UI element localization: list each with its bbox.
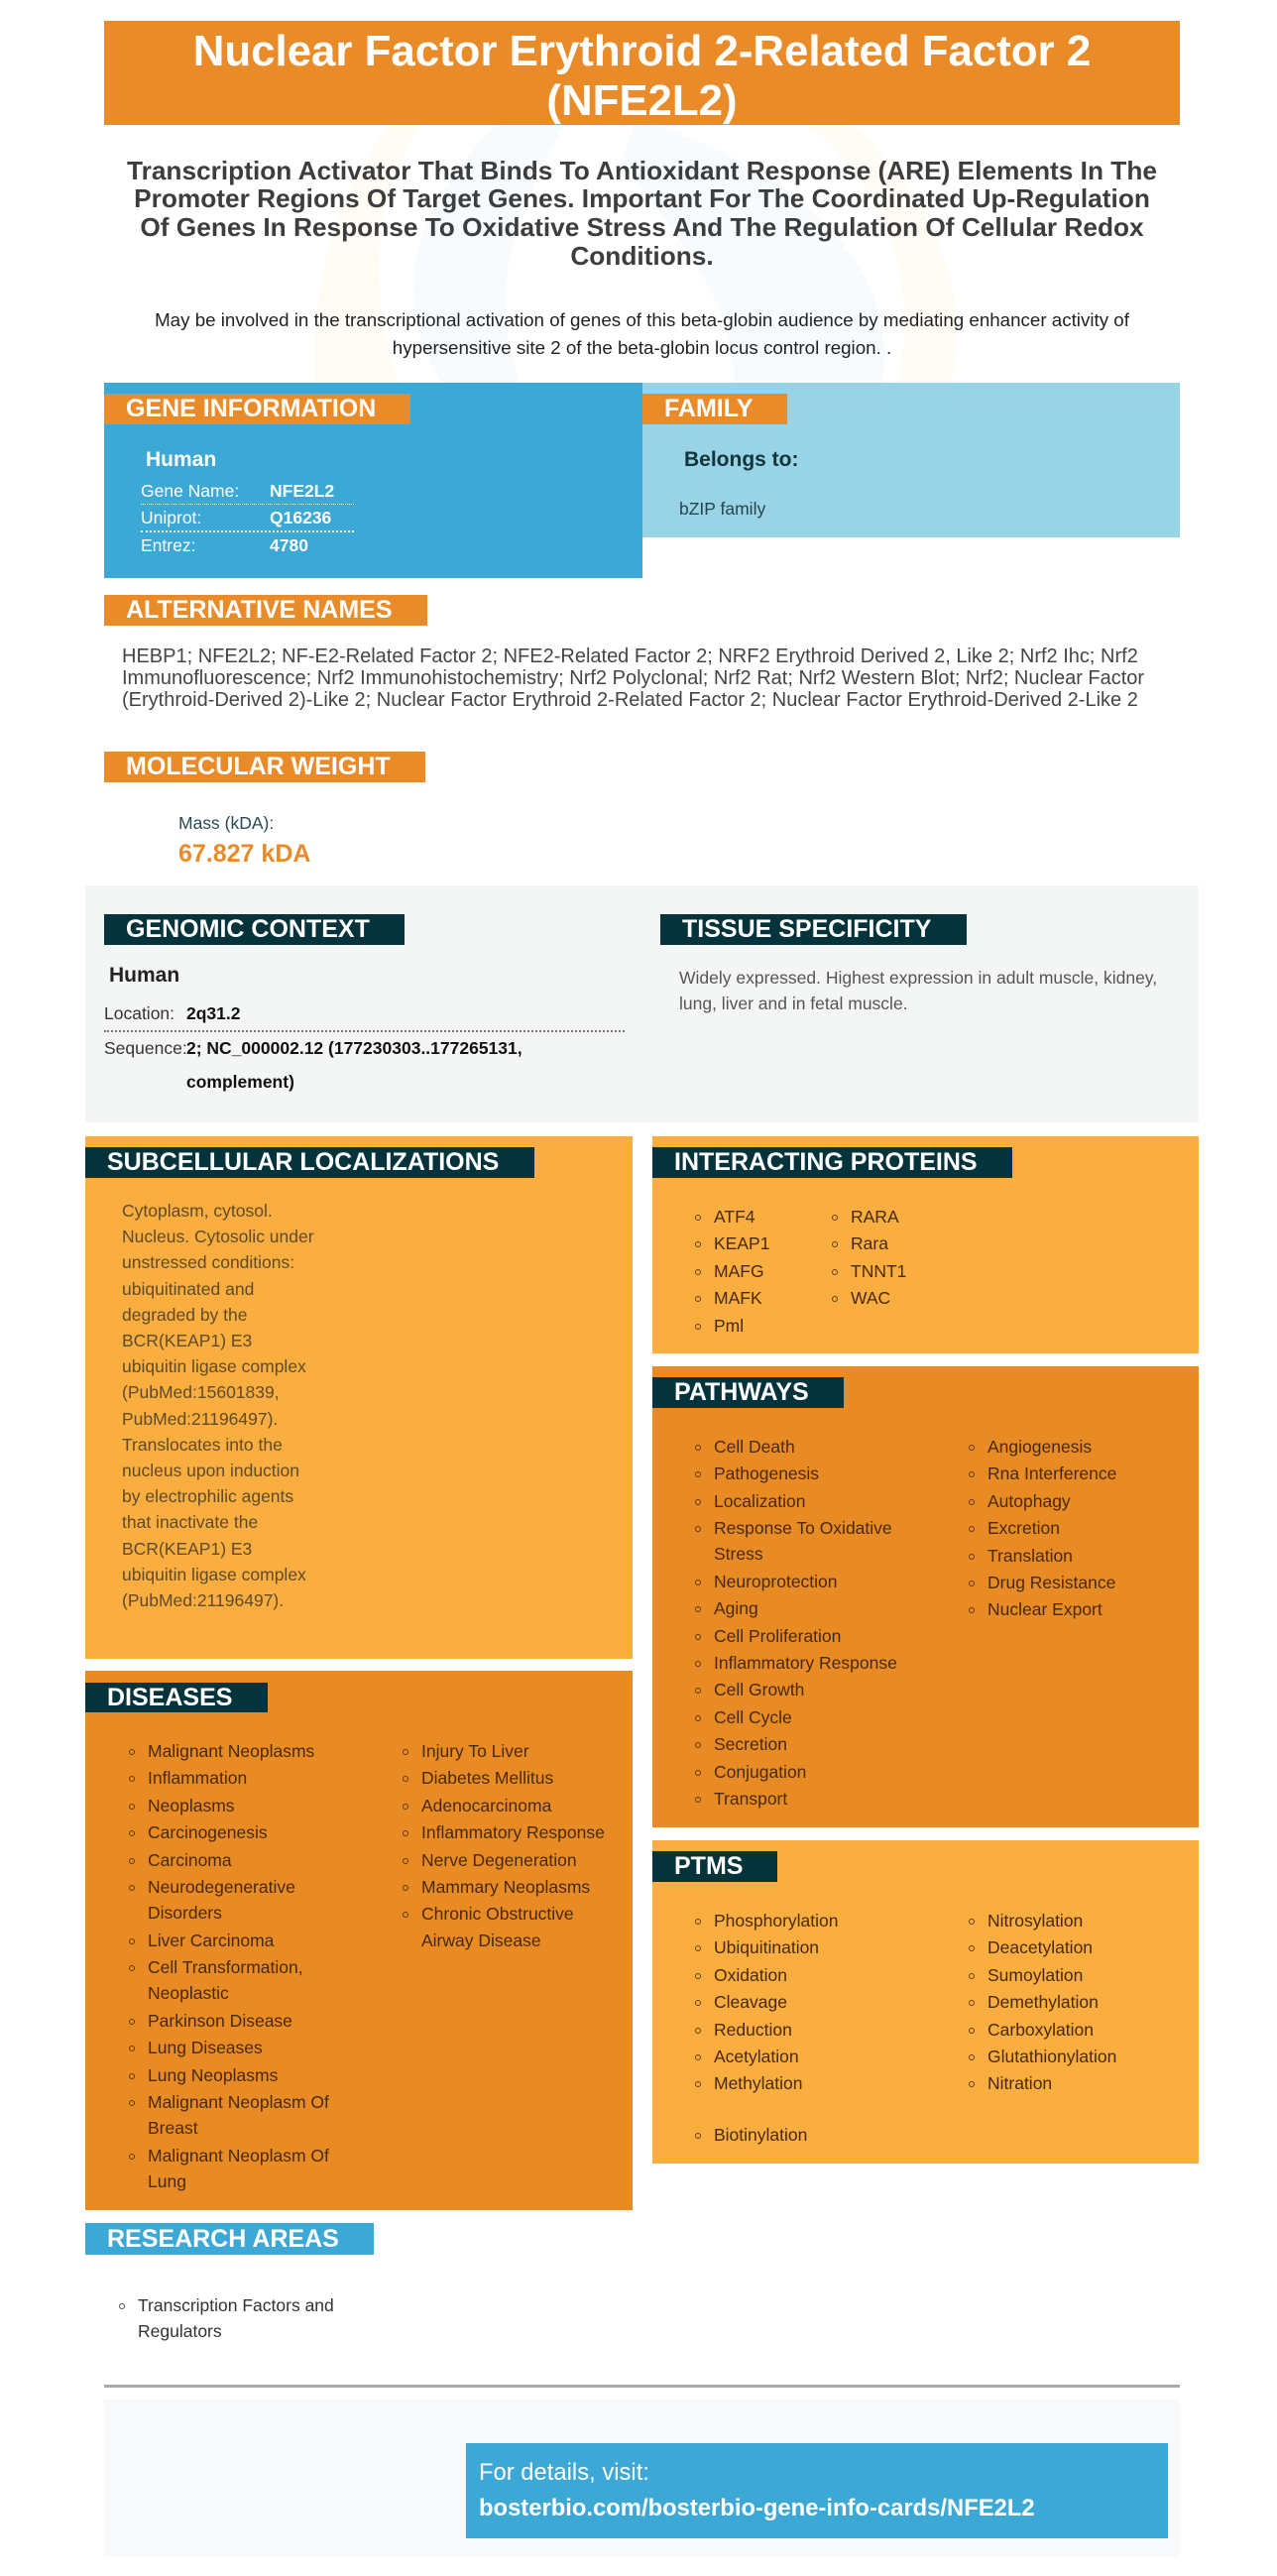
list: research areas: Transcription Factors and — [138, 2295, 334, 2315]
list: pathways column 2: Excretion — [987, 1518, 1060, 1538]
heading: diseases — [85, 1683, 268, 1712]
list: ptms column 2: Glutathionylation — [987, 2047, 1116, 2066]
localization text: BCR(KEAP1) E3 — [122, 1331, 252, 1350]
list: pathways column 2: Nuclear Export — [987, 1599, 1103, 1619]
list: ptms column 1: Acetylation — [714, 2047, 799, 2066]
heading: family: FAMILY — [664, 395, 753, 422]
list: proteins column 1 — [695, 1207, 769, 1336]
list: ptms column 1: Biotinylation — [714, 2125, 807, 2145]
heading: tissue specificity: TISSUE SPECIFICITY — [682, 915, 931, 943]
localization text: ubiquitinated and — [122, 1279, 254, 1299]
panel: subcellular localizations — [85, 1136, 633, 1659]
divider rule — [104, 2385, 1180, 2388]
list: pathways column 2: Translation — [987, 1546, 1073, 1566]
list: diseases column 1: Disorders — [148, 1903, 222, 1923]
localization text — [122, 1201, 314, 1610]
list: ptms column 1: Methylation — [714, 2073, 803, 2093]
list: pathways column 1: Cell Proliferation — [714, 1626, 841, 1646]
panel: pathways — [652, 1366, 1199, 1827]
heading: genomic context: GENOMIC CONTEXT — [126, 915, 370, 943]
mass label: Mass (kDA): — [178, 813, 274, 833]
list: pathways column 1: Inflammatory Response — [714, 1653, 897, 1673]
list: pathways column 2: Angiogenesis — [987, 1437, 1092, 1457]
species label: Human — [146, 448, 216, 471]
belongs to label: Belongs to: — [684, 448, 799, 471]
localization text: BCR(KEAP1) E3 — [122, 1539, 252, 1559]
subtitle: Of Genes In Response To Oxidative Stress And The Regulation Of Cellular Redox — [140, 212, 1144, 242]
list: diseases column 1: Lung Neoplasms — [148, 2064, 278, 2084]
list: ptms column 2: Nitration — [987, 2073, 1052, 2093]
list: pathways column 2: Autophagy — [987, 1491, 1071, 1511]
list: diseases column 2: Mammary Neoplasms — [421, 1877, 590, 1897]
panel: family — [642, 383, 1180, 537]
list: proteins column 2: Rara — [851, 1233, 888, 1253]
location row — [104, 1002, 625, 1032]
species label: Human — [109, 964, 179, 987]
panel: interacting proteins — [652, 1136, 1199, 1353]
uniprot row: Q16236 — [270, 508, 331, 527]
title banner: Nuclear Factor Erythroid 2-Related Factor 2 — [193, 27, 1091, 75]
list: pathways column 1: Secretion — [714, 1734, 787, 1754]
list: ptms column 1: Cleavage — [714, 1992, 787, 2012]
alternative names text: (Erythroid-Derived 2)-Like 2; Nuclear Factor Erythroid 2-Related Factor 2; Nuclear Factor Erythroid-Derived 2-Like 2 — [122, 689, 1138, 711]
list: pathways column 1: Localization — [714, 1491, 805, 1511]
list: ptms column 2 — [969, 1911, 1116, 2093]
subtitle — [127, 156, 1157, 271]
list: diseases column 1: Inflammation — [148, 1768, 247, 1788]
heading: pathways: PATHWAYS — [674, 1378, 809, 1406]
list: diseases column 1: Carcinoma — [148, 1850, 232, 1870]
list: diseases column 2: Airway Disease — [421, 1931, 541, 1950]
gene name row: NFE2L2 — [270, 481, 334, 501]
list: diseases column 1: Neurodegenerative — [148, 1877, 295, 1897]
mass value: 67.827 kDA — [178, 840, 310, 868]
list: diseases column 1: Lung Diseases — [148, 2038, 263, 2057]
list: proteins column 2 — [832, 1207, 906, 1308]
list: diseases column 2: Injury To Liver — [421, 1741, 529, 1761]
list: ptms column 1: Oxidation — [714, 1965, 787, 1985]
list: ptms column 2: Demethylation — [987, 1992, 1099, 2012]
gene name row — [141, 480, 354, 505]
sequence row: Sequence: — [104, 1038, 187, 1058]
heading: alternative names: ALTERNATIVE NAMES — [126, 596, 393, 624]
tissue specificity text: lung, liver and in fetal muscle. — [679, 994, 908, 1013]
list: ptms column 1 — [695, 1911, 839, 2145]
localization text: Translocates into the — [122, 1435, 283, 1455]
list: diseases column 2: Chronic Obstructive — [421, 1904, 574, 1924]
list: pathways column 1: Response To Oxidative — [714, 1518, 892, 1538]
list: proteins column 2: WAC — [851, 1288, 890, 1308]
localization text: unstressed conditions: — [122, 1252, 294, 1272]
subtitle: Transcription Activator That Binds To Antioxidant Response (ARE) Elements In The — [127, 156, 1157, 185]
list: pathways column 1: Conjugation — [714, 1762, 806, 1782]
tissue specificity text: Widely expressed. Highest expression in adult muscle, kidney, — [679, 968, 1157, 988]
description: hypersensitive site 2 of the beta-globin locus control region. . — [393, 337, 891, 358]
list: diseases column 2: Inflammatory Response — [421, 1822, 605, 1842]
list: research areas — [119, 2295, 334, 2341]
panel: gene information — [104, 383, 642, 578]
family value: bZIP family — [679, 499, 765, 519]
description — [155, 309, 1129, 358]
entrez row: Entrez: — [141, 535, 195, 555]
list: diseases column 1: Neoplastic — [148, 1983, 229, 2003]
localization text: Cytoplasm, cytosol. — [122, 1201, 273, 1221]
alternative names text — [122, 645, 1144, 711]
localization text: (PubMed:21196497). — [122, 1590, 284, 1610]
list: proteins column 2: RARA — [851, 1207, 899, 1227]
entrez row: 4780 — [270, 535, 308, 555]
heading: ptms: PTMS — [674, 1852, 743, 1880]
location row: Location: — [104, 1003, 174, 1023]
heading: family — [642, 394, 787, 424]
list: diseases column 2 — [403, 1741, 605, 1950]
heading: pathways — [652, 1377, 844, 1408]
localization text: (PubMed:15601839, — [122, 1382, 280, 1402]
visit text: For details, visit: — [479, 2459, 649, 2486]
description: May be involved in the transcriptional activation of genes of this beta-globin audience by mediating enhancer activity of — [155, 309, 1129, 330]
list: pathways column 1: Transport — [714, 1789, 787, 1809]
subtitle: Promoter Regions Of Target Genes. Important For The Coordinated Up-Regulation — [134, 183, 1150, 213]
list: diseases column 1: Cell Transformation, — [148, 1957, 303, 1977]
localization text: Nucleus. Cytosolic under — [122, 1227, 314, 1246]
list: ptms column 2: Sumoylation — [987, 1965, 1083, 1985]
callout: details link — [466, 2443, 1168, 2538]
list: proteins column 1: MAFK — [714, 1288, 762, 1308]
subtitle: Conditions. — [570, 241, 714, 271]
localization text: that inactivate the — [122, 1512, 258, 1532]
localization text: ubiquitin ligase complex — [122, 1356, 306, 1376]
list: diseases column 1: Malignant Neoplasm Of — [148, 2146, 329, 2166]
heading: research areas: RESEARCH AREAS — [107, 2225, 339, 2253]
list: proteins column 2: TNNT1 — [851, 1261, 906, 1281]
location row: 2q31.2 — [186, 1003, 240, 1023]
uniprot row: Uniprot: — [141, 508, 201, 527]
list: diseases column 1: Malignant Neoplasm Of — [148, 2092, 329, 2112]
list: proteins column 1: MAFG — [714, 1261, 764, 1281]
alternative names text: Immunofluorescence; Nrf2 Immunohistochemistry; Nrf2 Polyclonal; Nrf2 Rat; Nrf2 Western Blot; Nrf2; Nuclear Factor — [122, 667, 1144, 689]
list: pathways column 2: Rna Interference — [987, 1464, 1116, 1483]
list: ptms column 2: Carboxylation — [987, 2020, 1094, 2040]
list: ptms column 2: Nitrosylation — [987, 1911, 1083, 1931]
tissue specificity text — [679, 968, 1157, 1013]
localization text: degraded by the — [122, 1305, 248, 1325]
list: pathways column 1: Aging — [714, 1598, 758, 1618]
list: pathways column 1: Pathogenesis — [714, 1464, 819, 1483]
list: pathways column 1: Cell Cycle — [714, 1707, 792, 1727]
alternative names text: HEBP1; NFE2L2; NF-E2-Related Factor 2; NFE2-Related Factor 2; NRF2 Erythroid Derived 2, Like 2; Nrf2 Ihc; Nrf2 — [122, 645, 1138, 667]
heading: gene information: GENE INFORMATION — [126, 395, 376, 422]
panel: genomic context and tissue specificity — [85, 885, 1199, 1122]
gene name row: Gene Name: — [141, 481, 239, 501]
heading: interacting proteins: INTERACTING PROTEINS — [674, 1148, 978, 1176]
list: diseases column 2: Adenocarcinoma — [421, 1796, 551, 1815]
list: pathways column 2 — [969, 1437, 1116, 1619]
url: bosterbio.com/bosterbio-gene-info-cards/NFE2L2 — [479, 2495, 1035, 2521]
heading: subcellular localizations: SUBCELLULAR LOCALIZATIONS — [107, 1148, 499, 1176]
sequence row: complement) — [186, 1072, 294, 1092]
panel: ptms — [652, 1840, 1199, 2164]
localization text: by electrophilic agents — [122, 1486, 293, 1506]
list: diseases column 1: Carcinogenesis — [148, 1822, 268, 1842]
list: proteins column 1: Pml — [714, 1316, 744, 1336]
list: ptms column 1: Phosphorylation — [714, 1911, 839, 1931]
list: diseases column 2: Diabetes Mellitus — [421, 1768, 553, 1788]
localization text: PubMed:21196497). — [122, 1409, 278, 1429]
title banner: (NFE2L2) — [546, 76, 738, 125]
list: diseases column 2: Nerve Degeneration — [421, 1850, 577, 1870]
list: proteins column 1: ATF4 — [714, 1207, 755, 1227]
heading: ptms — [652, 1851, 777, 1882]
list: diseases column 1: Neoplasms — [148, 1796, 235, 1815]
uniprot row — [141, 507, 354, 532]
background watermark logo — [315, 125, 957, 383]
list: diseases column 1 — [129, 1741, 329, 2191]
heading: molecular weight: MOLECULAR WEIGHT — [126, 753, 391, 780]
list: diseases column 1: Breast — [148, 2118, 198, 2138]
panel: diseases — [85, 1671, 633, 2210]
entrez row — [141, 535, 308, 555]
list: pathways column 1: Neuroprotection — [714, 1572, 838, 1591]
heading: diseases: DISEASES — [107, 1684, 232, 1711]
list: diseases column 1: Liver Carcinoma — [148, 1931, 274, 1950]
list: ptms column 2: Deacetylation — [987, 1937, 1093, 1957]
list: pathways column 1: Cell Growth — [714, 1680, 804, 1699]
list: research areas: Regulators — [138, 2321, 222, 2341]
list: pathways column 2: Drug Resistance — [987, 1573, 1115, 1592]
list: ptms column 1: Reduction — [714, 2020, 792, 2040]
list: diseases column 1: Lung — [148, 2171, 186, 2191]
panel: footer — [104, 2400, 1180, 2557]
sequence row — [104, 1038, 522, 1092]
localization text: nucleus upon induction — [122, 1461, 299, 1480]
localization text: ubiquitin ligase complex — [122, 1565, 306, 1584]
sequence row: 2; NC_000002.12 (177230303..177265131, — [186, 1038, 522, 1058]
list: pathways column 1: Cell Death — [714, 1437, 795, 1457]
list: pathways column 1 — [695, 1437, 897, 1809]
list: diseases column 1: Parkinson Disease — [148, 2011, 292, 2031]
list: pathways column 1: Stress — [714, 1544, 763, 1564]
list: proteins column 1: KEAP1 — [714, 1233, 769, 1253]
title banner — [104, 21, 1180, 125]
list: diseases column 1: Malignant Neoplasms — [148, 1741, 314, 1761]
list: ptms column 1: Ubiquitination — [714, 1937, 819, 1957]
